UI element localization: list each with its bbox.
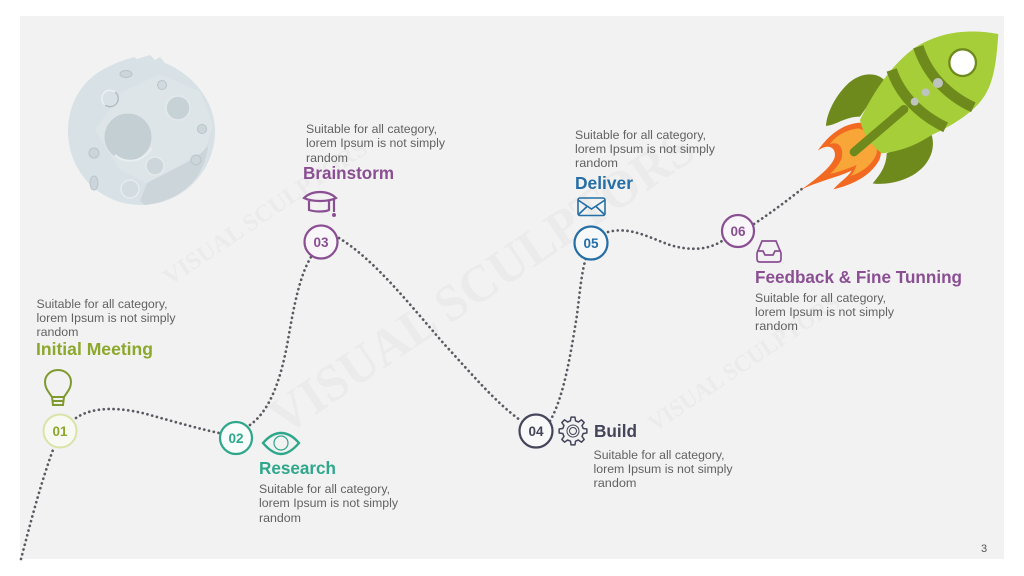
step 04 node (520, 414, 552, 448)
step 01 description: Suitable for all category, (36, 297, 168, 311)
rocket window (949, 49, 976, 76)
step 06 description: lorem Ipsum is not simply (755, 305, 895, 319)
step 04: build (520, 414, 733, 490)
step 05 node: 05 (583, 236, 599, 251)
step 06 node (722, 215, 754, 247)
step 05: deliver (574, 128, 716, 260)
step 04 description: lorem Ipsum is not simply (594, 462, 733, 476)
step 02 description: random (259, 511, 301, 525)
icon: eye (263, 433, 299, 454)
step 01 description: random (36, 325, 78, 339)
step 03: brainstorm (303, 122, 446, 258)
step 03 description: random (306, 151, 348, 165)
step 03 heading: Brainstorm (303, 163, 394, 183)
step 04 heading: Build (594, 421, 637, 441)
step 05 description: lorem Ipsum is not simply (575, 142, 716, 156)
moon illustration (68, 55, 215, 205)
step 02 description: lorem Ipsum is not simply (259, 496, 399, 510)
step 04 description: Suitable for all category, (594, 448, 724, 462)
step 01 heading: Initial Meeting (36, 339, 153, 359)
step 05 description: random (575, 156, 618, 170)
rocket stripes (854, 47, 973, 152)
step 01 node: 01 (52, 424, 68, 439)
icon: envelope (578, 198, 605, 216)
icon: light bulb (45, 370, 71, 405)
step 01 description: lorem Ipsum is not simply (36, 311, 176, 325)
step 01 node (44, 414, 76, 448)
step 02 node (220, 422, 252, 454)
watermark text: VISUAL SCULPTORS (259, 119, 705, 446)
page number: 3 (981, 543, 987, 555)
step 04 node: 04 (528, 424, 544, 439)
step 02 description: Suitable for all category, (259, 482, 390, 496)
icon: inbox tray (757, 241, 781, 262)
step 06 node: 06 (730, 224, 746, 239)
rocket flame (801, 123, 881, 190)
icon: graduation cap (304, 192, 336, 217)
watermark text: VISUAL SCULPTORS (159, 135, 372, 291)
step 06 heading: Feedback & Fine Tunning (755, 267, 962, 287)
step 03 node: 03 (313, 235, 329, 250)
step 05 heading: Deliver (575, 173, 633, 193)
step 06 description: random (755, 319, 798, 333)
moon craters (89, 70, 206, 198)
step 01: initial meeting (36, 297, 176, 448)
step 02: research (220, 422, 399, 525)
step 03 description: Suitable for all category, (306, 122, 437, 136)
rocket rivets (911, 78, 943, 106)
step 04 description: random (594, 476, 636, 490)
step 05 node (574, 226, 608, 260)
step 06 description: Suitable for all category, (755, 291, 886, 305)
rocket fins (826, 74, 885, 126)
step 06: feedback (722, 215, 962, 333)
dotted journey path (21, 188, 803, 559)
rocket body (860, 32, 998, 153)
watermark text: VISUAL SCULPTORS (644, 290, 845, 437)
step 03 description: lorem Ipsum is not simply (306, 136, 446, 150)
icon: gear (559, 417, 587, 445)
step 05 description: Suitable for all category, (575, 128, 706, 142)
rocket illustration (801, 32, 998, 190)
step 02 node: 02 (228, 431, 244, 446)
watermark text (159, 119, 845, 446)
step 02 heading: Research (259, 458, 336, 478)
step 03 node (304, 226, 338, 258)
